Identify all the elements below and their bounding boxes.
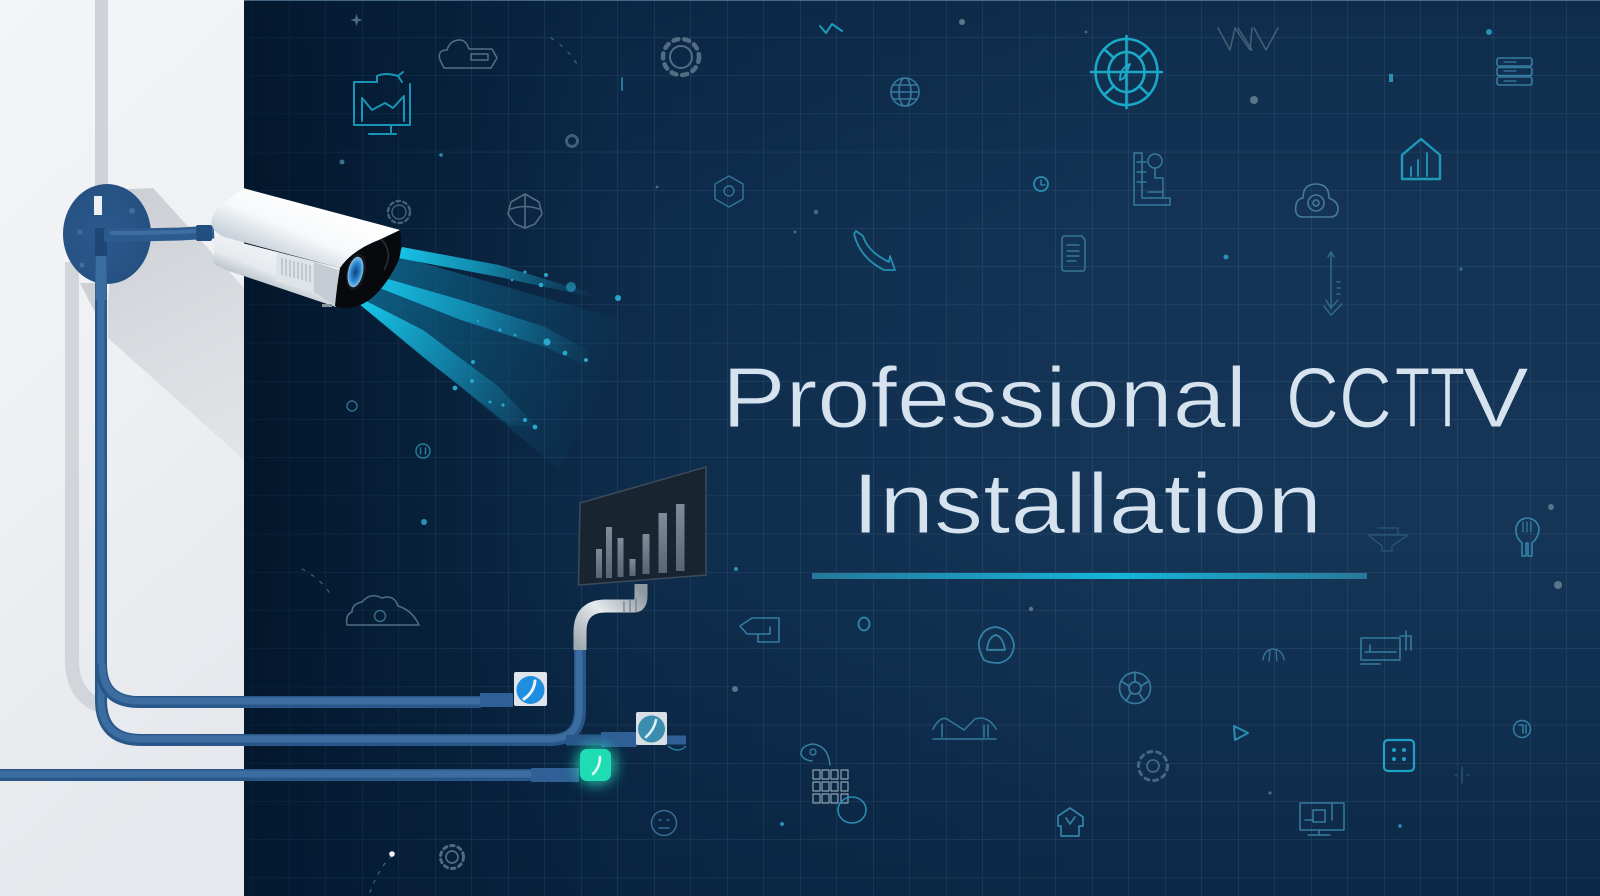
junction box 2 with teal dial [566,712,686,750]
camera lens [343,252,369,292]
icon: cloud [439,40,497,68]
icon: wheel [1120,672,1150,704]
title [722,351,1529,552]
silver elbow pipe to monitor [580,584,641,650]
icon: ring letter [1514,720,1530,738]
bar chart on monitor [596,504,684,578]
camera sunshield [212,188,400,268]
icon: chevron wave [820,24,842,33]
icon: dashed trail from white dot [370,856,392,892]
title: TT [1395,351,1465,446]
icon: arch [1263,649,1284,661]
monitor with bar chart [578,467,706,585]
icon: mountain signal [933,718,996,739]
icon: gear [663,39,699,75]
icon: drop ring [858,618,870,630]
icon: house chart [1402,139,1440,179]
icon: cloud lower left [347,596,419,625]
icon: control card [1361,631,1411,664]
icon: down arrow with ticks [1324,252,1342,315]
icon: monitor chart [354,72,410,134]
icon: small gear [566,136,578,146]
icon: fork key [1516,518,1539,556]
icon: document [1062,236,1085,271]
icon: cloud with gear [1296,184,1338,217]
camera light beams [358,247,640,470]
icon: face circle [652,810,676,836]
icon: dashed arc upper [551,38,579,68]
beam particles [453,270,621,429]
conduit: main pipes [0,240,580,775]
icon: globe [891,78,919,106]
wall shadow of conduit [72,262,100,706]
icon: gear left [388,201,410,223]
pipe to monitor [101,240,580,740]
icon: blueprint plan [1134,153,1170,205]
icon: chevron glyph [1218,28,1278,50]
title: Installation [852,457,1322,552]
wall shadow of camera [108,188,244,460]
icon: small clock [1034,177,1048,191]
wall shadow behind plate [80,283,96,314]
title: CC [1286,351,1392,446]
panel: white wall [0,0,244,896]
icon: faint funnel [1368,528,1408,551]
title: V [1463,351,1529,446]
title underline [812,573,1367,579]
mounting plate and arm [63,184,214,300]
icon: dice panel [1384,740,1414,771]
icon: exclamation [621,78,623,90]
camera lower body [214,236,340,307]
pipe to junction box three [0,774,532,775]
camera arm [104,232,214,235]
sparkle [350,14,362,26]
icon: house lower [1058,808,1083,836]
icon: gear bottom [440,846,464,868]
bright white dot [389,851,395,857]
icon: faint crosshair [1455,767,1469,783]
scattered dots [340,14,1562,857]
icon: target radar [1091,36,1162,108]
camera front face [335,230,401,308]
conduit from plate [96,256,106,300]
icon: stacked server [1497,58,1532,85]
icon: shield globe [508,194,542,228]
icon: gauge bubble [979,627,1014,663]
icon: pause ring [416,444,430,458]
icon: hexagon lock [715,176,743,207]
junction box 3 with green glow [531,745,616,785]
icon: phone handset [854,231,895,270]
icon: desktop plan [1300,803,1344,835]
vent panel [275,252,339,306]
icon: ring left [347,401,357,411]
icon: stacked layers [740,618,779,642]
pipe to junction box one [101,664,481,702]
junction box 1 with blue dial [480,672,547,707]
CCTV camera [212,188,401,308]
icon: dashed arc lower [302,569,331,595]
icon: gear lower [1138,752,1168,780]
title: Professional [722,351,1247,446]
background icons [302,24,1539,892]
icon: eye keypad [801,744,866,823]
icon: play triangle [1234,726,1248,740]
